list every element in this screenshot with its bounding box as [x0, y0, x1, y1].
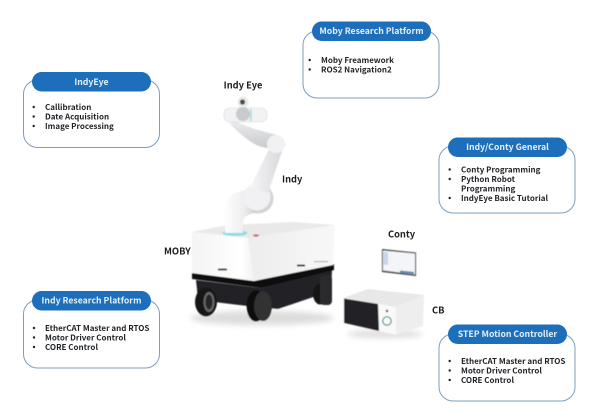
model mark: [314, 261, 328, 262]
panel: Indy Research Platform: [24, 291, 160, 368]
dark rim band: [192, 264, 334, 288]
floor shadow: [347, 330, 423, 338]
bullet list: EtherCAT Master and RTOS: [45, 323, 149, 334]
panel heading pill: [448, 324, 567, 344]
bullet list: Python Robot: [461, 174, 516, 185]
tablet left column: [384, 252, 388, 265]
shoulder joint: [244, 184, 270, 210]
teal wrist ring: [250, 109, 252, 121]
panel heading: Indy/Conty General: [466, 140, 549, 153]
label: Indy Eye: Indy Eye: [224, 78, 262, 92]
forearm: [223, 114, 286, 148]
camera: Indy Eye: [238, 96, 248, 108]
panel heading: Moby Research Platform: [319, 24, 424, 37]
panel heading pill: [312, 22, 431, 41]
panel outline: [24, 80, 160, 148]
panel outline: [439, 334, 575, 401]
panel: Indy/Conty General: [439, 138, 575, 213]
panel heading: IndyEye: [74, 75, 109, 88]
shoulder shadow: [244, 184, 274, 214]
tablet screen: [383, 250, 415, 274]
left slot: [218, 268, 227, 270]
rear left wheel: [195, 288, 217, 316]
panel: Moby Research Platform: [303, 22, 439, 98]
label: Conty: Conty: [388, 226, 416, 240]
bullet list: CORE Control: [45, 342, 98, 353]
panel: STEP Motion Controller: [439, 324, 575, 401]
label: MOBY: MOBY: [164, 244, 191, 258]
bullet list: Image Processing: [45, 121, 114, 132]
elbow: [267, 135, 285, 153]
arm base column: [225, 189, 257, 233]
bullet list: ROS2 Navigation2: [321, 64, 392, 75]
right slot: [297, 264, 305, 266]
label: CB: CB: [432, 302, 444, 316]
panel outline: [303, 31, 439, 98]
bullet list: [33, 323, 149, 353]
teal ring switch: [383, 317, 391, 325]
bullet list: EtherCAT Master and RTOS: [461, 356, 565, 367]
tablet bottom bar: [400, 270, 414, 274]
panel: IndyEye: [24, 72, 160, 148]
device: Conty tablet: [382, 249, 416, 276]
black lower chassis: [196, 270, 332, 309]
main link: [250, 145, 284, 193]
robot: Indy arm: [223, 96, 286, 233]
bullet list: Moby Freamework: [321, 55, 394, 66]
blue base ring: [222, 230, 248, 236]
body top face: [192, 222, 335, 238]
panel outline: [439, 146, 575, 213]
device: CB controller box: [343, 289, 424, 338]
panel heading pill: [32, 72, 151, 92]
box front: [343, 298, 396, 335]
front wheel: [246, 290, 272, 322]
right wheel: [313, 275, 332, 305]
box top: [343, 289, 424, 307]
panel outline: [24, 300, 160, 368]
power button: [386, 310, 388, 312]
panel heading: STEP Motion Controller: [458, 327, 557, 340]
wrist joint: [236, 107, 250, 121]
bullet list: Programming: [461, 184, 515, 194]
box right side: [396, 295, 424, 335]
bullet list: Callibration: [45, 102, 91, 113]
bullet list: CORE Control: [461, 375, 514, 386]
bullet list: Motor Driver Control: [461, 365, 542, 376]
camera lens: [240, 99, 245, 105]
red status light: [253, 234, 259, 237]
wrist housing: [224, 108, 267, 122]
body front face: [192, 232, 254, 281]
bullet list: Conty Programming: [461, 164, 541, 175]
floor shadow: [190, 311, 334, 325]
bullet list: [448, 164, 549, 204]
robot: MOBY mobile base: [190, 222, 335, 325]
bullet list: Motor Driver Control: [45, 332, 126, 343]
panel heading: Indy Research Platform: [42, 294, 141, 306]
bullet list: [32, 102, 114, 132]
tablet bezel: [382, 249, 416, 276]
label: Indy: Indy: [282, 172, 303, 186]
bullet list: Date Acquisition: [45, 111, 109, 122]
bullet list: [308, 55, 394, 75]
bullet list: [448, 356, 565, 386]
dark front panel: [344, 298, 379, 331]
panel heading pill: [448, 138, 567, 157]
bullet list: IndyEye Basic Tutorial: [461, 193, 549, 204]
body right face: [248, 225, 335, 281]
panel heading pill: [32, 291, 151, 310]
